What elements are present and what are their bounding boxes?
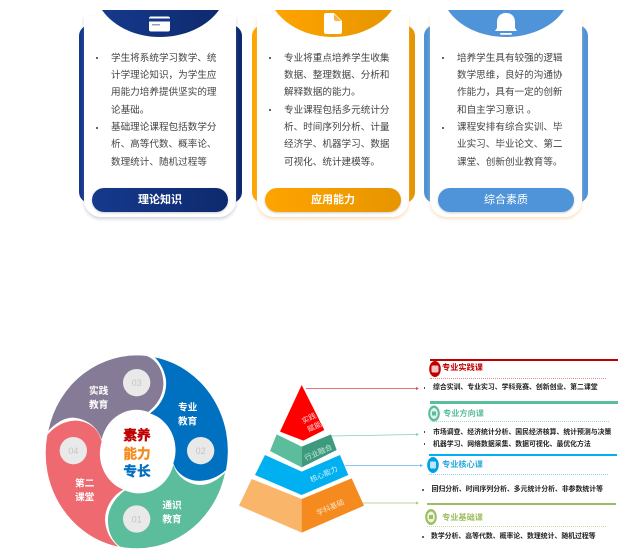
button label: 理论知识 <box>138 194 182 206</box>
bullet text: 专业课程包括多元统计分 <box>284 105 390 116</box>
segment: practical education: 实践 <box>89 385 109 397</box>
course list: 回归分析、时间序列分析、多元统计分析、非参数统计等 <box>432 486 603 492</box>
bullet text <box>284 52 390 168</box>
pyramid tier: discipline foundation: 学科基础 <box>315 497 345 518</box>
icon: core course badge <box>427 457 439 473</box>
bullet text: 数学思维，良好的沟通协 <box>457 70 563 81</box>
button label <box>438 188 574 212</box>
dotted rule <box>429 474 608 475</box>
bullet text: 培养学生具有较强的逻辑 <box>457 52 563 64</box>
course list: 数学分析、高等代数、概率论、数理统计、随机过程等 <box>431 532 596 540</box>
dotted rule <box>430 378 606 379</box>
bullet marker <box>269 57 271 59</box>
course list <box>433 428 612 448</box>
bullet text <box>111 52 217 168</box>
segment: practical education: 教育 <box>89 399 109 411</box>
bullet text: 基础理论课程包括数学分 <box>111 122 217 133</box>
wheel centre text: 素养 <box>123 427 151 443</box>
button label <box>92 188 228 212</box>
bullet marker <box>96 57 98 59</box>
section rule <box>427 502 616 505</box>
segment: general education <box>108 465 225 548</box>
bullet <box>422 489 424 490</box>
bullet text: 作能力，具有一定的创新 <box>457 87 563 98</box>
section rule <box>430 358 618 361</box>
card side colour <box>252 25 415 203</box>
wheel centre text: 专长 <box>123 463 151 479</box>
bullet marker <box>96 126 98 128</box>
icon: dome with bell <box>448 10 564 37</box>
pyramid tier: industry integration: 行业融合 <box>303 442 334 463</box>
bullet <box>424 387 425 388</box>
pyramid tier: practice <box>280 385 324 441</box>
pyramid tier: practice: 赋能 <box>306 419 324 434</box>
segment: general education: 01 <box>132 514 142 524</box>
segment: second classroom: 第二 <box>75 478 95 490</box>
segment: second classroom: 课堂 <box>75 492 95 504</box>
bullet marker <box>442 57 444 59</box>
arrow: industry to direction courses <box>332 433 419 436</box>
bullet text: 和自主学习意识 。 <box>457 105 536 116</box>
course list: 机器学习、网络数据采集、数据可视化、最优化方法 <box>433 441 591 448</box>
bullet text <box>457 52 563 168</box>
button label: 应用能力 <box>311 194 355 206</box>
bullet text: 课堂、创新创业教育等。 <box>457 157 563 168</box>
section rule <box>430 401 618 404</box>
icon: document sheet <box>324 13 342 34</box>
bullet text: 学生将系统学习数学、统 <box>111 52 217 64</box>
pyramid tier: core ability <box>255 455 348 495</box>
course list: 综合实训、专业实习、学科竞赛、创新创业、第二课堂 <box>433 384 598 391</box>
segment: practical education <box>48 355 163 439</box>
arrow: foundation to foundation courses <box>363 502 419 504</box>
panel: theoretical knowledge card <box>79 10 242 220</box>
card side colour <box>424 25 588 203</box>
card side colour <box>79 25 242 203</box>
section rule <box>429 454 617 456</box>
bullet <box>422 536 424 538</box>
dotted rule <box>430 421 609 422</box>
pyramid tier: core ability: 核心能力 <box>309 464 339 484</box>
heading: 专业方向课 <box>443 408 484 418</box>
bullet text: 业实习、毕业论文、第二 <box>457 139 563 150</box>
card white body <box>84 16 236 217</box>
card white body <box>257 16 409 217</box>
panel: direction courses <box>424 401 618 448</box>
button label <box>265 188 401 212</box>
bullet text: 专业将重点培养学生收集 <box>284 52 390 64</box>
wheel centre text: 能力 <box>123 445 151 461</box>
chart: competency pyramid <box>239 385 364 533</box>
panel: overall quality card <box>424 10 588 221</box>
bullet text: 计学理论知识，为学生应 <box>111 70 217 81</box>
segment: professional education: 专业 <box>178 402 198 414</box>
segment: general education: 通识 <box>162 500 182 511</box>
panel: core courses <box>422 454 617 492</box>
bullet text: 析、时间序列分析、计量 <box>284 122 390 133</box>
bullet marker <box>442 126 444 128</box>
bullet <box>424 443 425 444</box>
bullet text: 数理统计、随机过程等 <box>111 157 207 168</box>
panel: practical courses <box>424 359 618 391</box>
segment: second classroom <box>46 421 123 547</box>
bullet text: 经济学、机器学习、数据 <box>284 139 390 150</box>
bullet text: 课程安排有综合实训、毕 <box>457 122 563 133</box>
segment: professional education: 教育 <box>178 416 198 428</box>
icon: foundation course badge <box>425 509 437 525</box>
dotted rule <box>427 526 606 527</box>
arrow: practice to practical courses <box>306 387 419 390</box>
bullet marker <box>269 109 271 111</box>
bullet <box>424 431 425 432</box>
bullet text: 析、高等代数、概率论、 <box>111 139 217 150</box>
bullet text: 解释数据的能力。 <box>284 87 361 98</box>
heading: 专业基础课 <box>442 512 483 522</box>
card white body <box>430 16 582 217</box>
segment: practical education: 03 <box>132 378 142 388</box>
bullet text: 论基础。 <box>111 105 149 116</box>
icon: direction course badge <box>428 406 440 422</box>
pyramid tier: discipline foundation <box>239 478 364 533</box>
icon: dome with card <box>102 10 219 37</box>
course list: 市场调查、经济统计分析、国民经济核算、统计预测与决策 <box>433 428 611 436</box>
bullet text: 数据、整理数据、分析和 <box>284 70 390 81</box>
icon: dome with document <box>275 10 392 37</box>
pyramid tier: practice: 实践 <box>300 411 318 426</box>
bullet text: 用能力培养提供坚实的理 <box>111 87 217 98</box>
icon: practice course badge <box>429 361 441 377</box>
segment: professional education: 02 <box>196 446 206 456</box>
wheel centre text <box>123 427 151 479</box>
segment: general education: 教育 <box>162 513 182 525</box>
heading: 专业核心课 <box>442 460 483 469</box>
pyramid tier: industry integration <box>270 434 337 467</box>
panel: foundation courses <box>422 503 616 540</box>
arrow: core to core courses <box>345 464 423 467</box>
panel: applied ability card <box>252 10 415 221</box>
segment: second classroom: 04 <box>68 446 78 456</box>
button label: 综合素质 <box>484 194 528 206</box>
segment: professional education <box>150 357 228 481</box>
bullet text: 可视化、统计建模等。 <box>284 157 380 168</box>
heading: 专业实践课 <box>442 362 483 372</box>
